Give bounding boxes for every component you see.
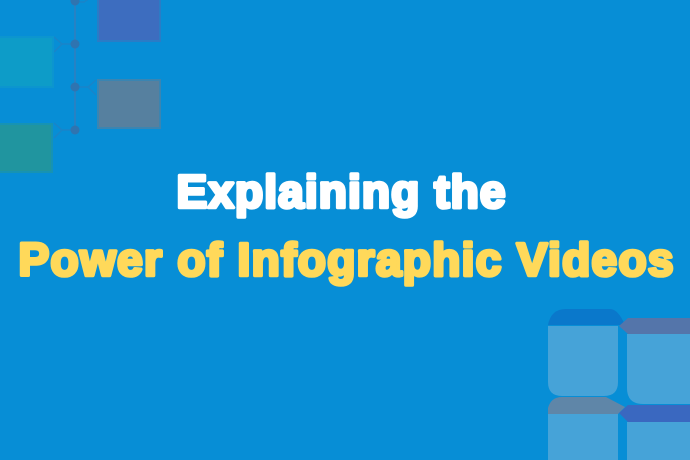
- box: teal-blue: [0, 37, 53, 87]
- flowchart decoration: top left: [0, 0, 160, 172]
- card grid decoration: bottom right: [548, 309, 690, 460]
- card: top left: [548, 309, 625, 396]
- title line: Explaining the: Explaining the: [176, 166, 506, 218]
- node: timeline dots: [70, 0, 80, 134]
- card: bottom left: [548, 397, 625, 460]
- box: slate: [98, 80, 160, 128]
- box: teal-green: [0, 124, 52, 172]
- card: bottom right: [619, 405, 690, 460]
- box: indigo: [98, 0, 160, 41]
- card: top right: [619, 318, 690, 404]
- title line: Power of Infographic Videos: Power of Infographic Videos: [18, 234, 674, 286]
